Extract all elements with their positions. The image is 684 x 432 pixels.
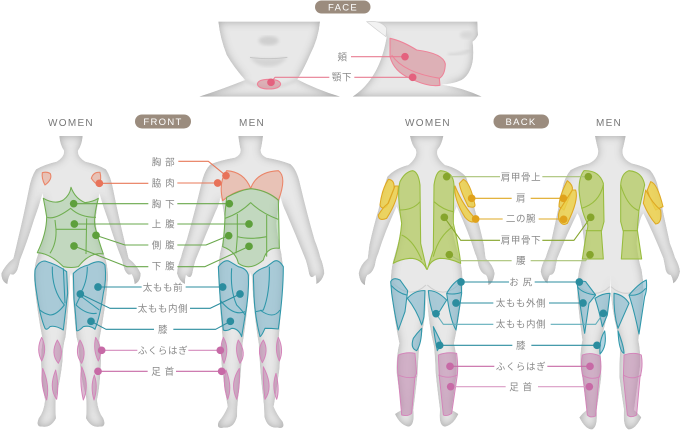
labels: back: 太もも内側	[496, 318, 546, 330]
labels: front: 太もも内側	[138, 303, 188, 315]
face front view	[199, 22, 340, 97]
zone: chest	[221, 171, 283, 201]
zone: back	[393, 171, 461, 269]
labels: front: 側 腹	[152, 240, 175, 252]
labels: back: ふくらはぎ	[496, 361, 546, 373]
leaders: torso	[70, 179, 148, 267]
badge: FACE	[315, 0, 370, 14]
buttock creases	[579, 287, 642, 293]
panel: face illustrations	[199, 21, 482, 97]
labels: back: 二の腕	[506, 214, 536, 225]
zone: hips and thighs	[577, 280, 647, 354]
figure: man front	[173, 136, 324, 428]
labels: face	[332, 52, 352, 84]
body silhouette	[1, 136, 141, 427]
heading: MEN front: MEN	[239, 118, 265, 129]
labels: back: お 尻	[509, 278, 533, 288]
leaders: legs	[432, 278, 512, 390]
leaders: face	[267, 53, 416, 86]
buttock creases	[393, 283, 460, 292]
zone: thighs	[218, 261, 283, 337]
labels: front: 胸 下	[152, 198, 175, 210]
zone: calves and ankles	[221, 337, 282, 399]
zone: chin and cheek	[257, 38, 445, 89]
leg zones and leaders	[531, 278, 647, 417]
leaders: torso	[177, 161, 253, 267]
badge: FRONT: FRONT	[143, 117, 183, 128]
labels: back: 肩甲骨下	[501, 236, 541, 246]
labels: back: 膝	[516, 340, 526, 352]
leaders: torso	[531, 173, 594, 261]
figure: woman back	[359, 136, 512, 427]
labels: front	[138, 156, 188, 378]
badge: FACE: FACE	[328, 2, 358, 14]
figure: man back	[531, 136, 680, 429]
badge: BACK	[494, 114, 549, 128]
body silhouette	[359, 136, 495, 427]
labels: front: ふくらはぎ	[138, 345, 188, 357]
zone: thighs	[35, 261, 106, 331]
labels: back: 肩	[516, 194, 526, 204]
leaders: legs	[173, 283, 244, 375]
labels: back: 腰	[516, 256, 526, 267]
labels: front: 下 腹	[152, 260, 175, 272]
labels: front: 上 腹	[152, 218, 175, 230]
labels: face: 頬	[337, 52, 348, 64]
zone: abdomen	[37, 187, 103, 267]
labels: back: 足 首	[509, 382, 533, 394]
leg zones and leaders	[391, 278, 512, 416]
leaders: torso	[440, 173, 512, 261]
labels: front: 胸 部	[152, 156, 175, 168]
heading: WOMEN back: WOMEN	[405, 118, 451, 129]
labels: front: 脇 肉	[152, 178, 175, 190]
heading: WOMEN front: WOMEN	[48, 118, 94, 129]
zone: calves	[397, 353, 458, 416]
figure: woman front	[1, 136, 154, 427]
labels: face: 顎下	[332, 72, 352, 84]
leaders: legs	[76, 283, 154, 375]
zone: hips and thighs	[391, 278, 462, 351]
zone: shoulders and upper arm	[558, 181, 663, 224]
labels: front: 足 首	[151, 366, 175, 378]
badge: BACK: BACK	[505, 117, 537, 128]
zone: abdomen	[223, 189, 279, 267]
badge: FRONT	[135, 114, 191, 128]
leaders: legs	[531, 278, 607, 390]
labels: back	[496, 172, 546, 394]
labels: front: 太もも前	[143, 282, 183, 294]
body silhouette	[541, 136, 680, 429]
zone: back	[579, 171, 645, 259]
heading: MEN back: MEN	[596, 118, 622, 129]
zone: calves and ankles	[39, 337, 101, 400]
zone: calves	[581, 353, 642, 417]
labels: front: 膝	[158, 324, 168, 336]
leg zones and leaders	[35, 261, 154, 400]
labels: back: 太もも外側	[496, 298, 546, 310]
leg zones and leaders	[173, 261, 283, 399]
face side view	[353, 21, 482, 97]
labels: back: 肩甲骨上	[501, 172, 541, 184]
zone: shoulders and upper arm	[378, 179, 477, 222]
body silhouette	[177, 136, 324, 428]
zone: armpit	[42, 172, 101, 185]
